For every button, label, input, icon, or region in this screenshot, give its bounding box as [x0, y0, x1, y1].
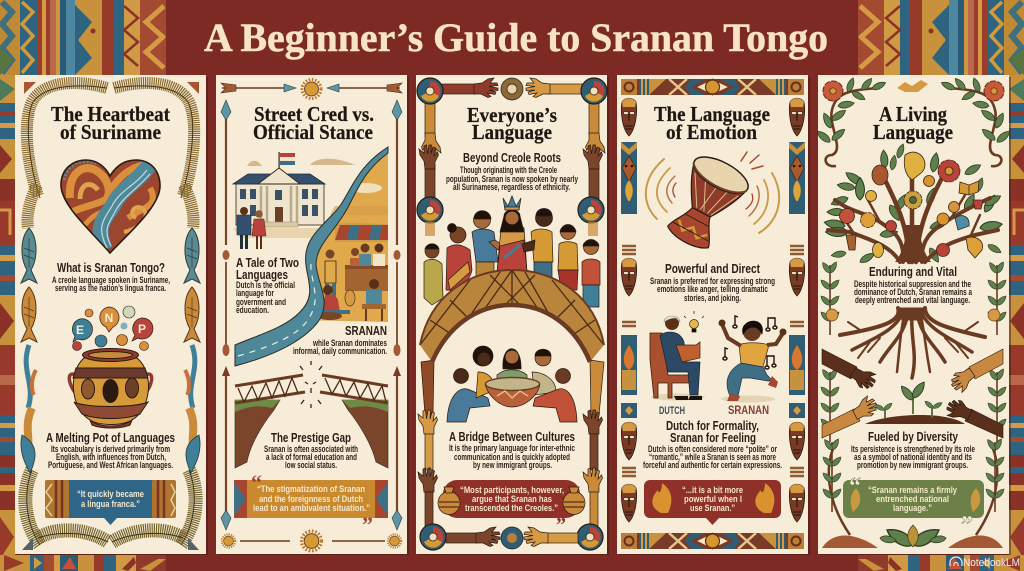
panel title [654, 102, 770, 144]
text block: tale of two languages: Languages [236, 268, 288, 282]
text block: melting pot of languages [46, 431, 175, 470]
text block: what is Sranan Tongo: What is Sranan Tongo? [57, 261, 165, 275]
text block: tale of two languages: education. [236, 305, 269, 315]
panel: The Language of Emotion [617, 75, 810, 555]
icon: speech bubbles rising from pot [72, 306, 153, 350]
text block: melting pot of languages: Portuguese, and West African languages. [48, 460, 173, 470]
icon: speech bubbles rising from pot: P [138, 322, 146, 336]
text block: Dutch for formality [643, 419, 782, 470]
text block: Dutch for formality: Dutch is often considered more “polite” or [648, 444, 777, 454]
text block: bridge between cultures: It is the primary language for inter-ethnic [449, 443, 575, 453]
text block: beyond Creole roots: all Surinamese, regardless of ethnicity. [453, 182, 570, 192]
text block: powerful and direct: Powerful and Direct [665, 262, 761, 276]
callout: lingua franca quote: a lingua franca.” [81, 498, 140, 509]
text block: bridge between cultures: by new immigrant groups. [473, 460, 552, 470]
labels: Dutch and Sranan: DUTCH [659, 405, 685, 417]
icon: four hands [822, 349, 1003, 438]
text block: melting pot of languages: A Melting Pot of Languages [46, 431, 175, 445]
callout: powerful when I use Sranan: powerful when I [684, 493, 742, 504]
illustration: river road between languages [235, 147, 388, 366]
panel title: Official Stance [253, 120, 373, 144]
illustration: broken bridge over cliffs [235, 361, 388, 468]
panel: Street Cred vs. Official Stance [216, 75, 409, 555]
callout: firmly entrenched quote: “ [849, 474, 861, 500]
border of arms, hands and medallions [417, 78, 607, 550]
text block: powerful and direct: Sranan is preferred for expressing strong [650, 276, 775, 286]
callout: stigmatization quote: “The stigmatization of Sranan [257, 483, 365, 494]
mask and totem columns [621, 98, 805, 522]
panel title: Street Cred vs. [254, 102, 374, 126]
panel title: of Suriname [60, 120, 161, 144]
callout: stigmatization quote: lead to an ambivalent situation.” [253, 502, 370, 513]
vine and flower border [815, 77, 1012, 550]
icon: speech bubbles rising from pot: E [76, 323, 84, 337]
text block: prestige gap: low social status. [285, 460, 337, 470]
illustration: Dutch speaker reading in a chair [650, 311, 705, 400]
callout: stigmatization quote: and the foreignness of Dutch [259, 493, 363, 504]
text block: enduring and vital: dominance of Dutch, Sranan remains a [854, 287, 972, 297]
panel title [467, 103, 557, 144]
icon: djembe drum with sound waves [646, 150, 779, 256]
panel title [873, 102, 953, 144]
callout: lingua franca quote: “It quickly became [77, 488, 144, 499]
text block: enduring and vital [854, 265, 972, 305]
textile border: top right [858, 0, 1024, 75]
illustration: government building with flag [233, 152, 355, 249]
text block: tale of two languages: A Tale of Two [236, 256, 299, 270]
illustration: community of people [424, 196, 600, 307]
text block: fueled by diversity: Its persistence is strengthened by its role [851, 444, 975, 454]
text block: enduring and vital: deeply entrenched and vital language. [855, 295, 970, 305]
text block: beyond Creole roots: population, Sranan is now spoken by nearly [446, 174, 578, 184]
callout: transcended the Creoles quote: ” [556, 514, 566, 536]
panel title: The Language [654, 102, 770, 126]
callout: stigmatization quote: ” [362, 512, 373, 537]
illustration: market side [302, 150, 388, 322]
callout: firmly entrenched quote: language.” [893, 502, 932, 513]
callout: transcended the Creoles quote: “Most participants, however, [460, 484, 564, 495]
illustration: tree of language [824, 143, 1003, 265]
textile border: left side [0, 75, 15, 571]
illustration: Sranan speaker dancing with music notes [718, 316, 786, 402]
icon: melting pot [69, 348, 152, 428]
callout: firmly entrenched quote: ” [961, 512, 973, 538]
callout: lingua franca quote [45, 480, 176, 525]
text block: prestige gap: The Prestige Gap [271, 431, 351, 445]
illustration: woven arch bridge [416, 265, 607, 365]
text block: melting pot of languages: Its vocabulary is derived primarily from [51, 444, 170, 454]
text block: enduring and vital: Enduring and Vital [869, 265, 957, 279]
callout: stigmatization quote: “ [251, 470, 262, 495]
watermark: NotebookLM: NotebookLM [963, 557, 1020, 569]
text block: what is Sranan Tongo [52, 261, 170, 293]
illustration: roots [840, 308, 985, 378]
text block: prestige gap: Sranan is often associated with [264, 444, 358, 454]
icon: sprouts on soil [865, 380, 965, 424]
text block: powerful and direct: emotions like anger, telling dramatic [657, 284, 768, 294]
text block: fueled by diversity [851, 430, 975, 470]
labels: Dutch and Sranan [659, 405, 769, 417]
text block: bridge between cultures: communication and is quickly adopted [454, 452, 570, 462]
title: A Beginner’s Guide to Sranan Tongo [204, 15, 828, 60]
text block: Dutch for formality: “romantic,” while a Sranan is seen as more [649, 452, 776, 462]
text block: tale of two languages: language for [236, 288, 274, 298]
text block: what is Sranan Tongo: A creole language spoken in Suriname, [52, 275, 170, 285]
panel: Everyone's Language [416, 75, 609, 555]
arrow and sun border [221, 80, 402, 551]
text block: Sranan label: informal, daily communication. [293, 346, 387, 356]
panel title: Language [472, 120, 552, 144]
textile border: right side [1009, 75, 1024, 571]
callout: powerful when I use Sranan: use Sranan.” [690, 502, 735, 513]
text block: tale of two languages: Dutch is the official [236, 280, 295, 290]
panel title: Language [873, 120, 953, 144]
panel: The Heartbeat of Suriname [15, 75, 208, 555]
text block: prestige gap: a lack of formal education and [266, 452, 357, 462]
text block: melting pot of languages: English, with influences from Dutch, [56, 452, 166, 462]
text block: Dutch for formality: forceful and authentic for certain expressions. [643, 460, 782, 470]
text block: beyond Creole roots: Though originating with the Creole [460, 165, 557, 175]
panel title: The Heartbeat [51, 102, 170, 126]
panel title: Everyone’s [467, 103, 557, 127]
text block: fueled by diversity: promotion by new immigrant groups. [857, 460, 968, 470]
text block: bridge between cultures [449, 430, 575, 470]
text block: fueled by diversity: Fueled by Diversity [868, 430, 958, 444]
icon: speech bubbles rising from pot: N [105, 311, 113, 325]
callout: transcended the Creoles quote: transcended the Creoles.” [465, 502, 558, 513]
patterned footer band [621, 533, 804, 549]
text block: tale of two languages [236, 256, 299, 315]
labels: Dutch and Sranan: SRANAN [728, 405, 769, 417]
illustration: people sharing a bowl [447, 346, 577, 422]
icon: two officials [237, 207, 266, 249]
textile border: top left [0, 0, 166, 75]
text block: beyond Creole roots [446, 151, 578, 192]
icon: heart with river [61, 160, 160, 253]
callout: firmly entrenched quote: “Sranan remains a firmly [868, 484, 958, 495]
palm frond border [22, 82, 199, 550]
text block: enduring and vital: Despite historical suppression and the [854, 279, 971, 289]
callout: powerful when I use Sranan [644, 480, 781, 525]
text block: prestige gap [264, 431, 358, 470]
panel: A Living Language [815, 75, 1012, 555]
panel title: of Emotion [666, 120, 757, 144]
text block: tale of two languages: government and [236, 297, 286, 307]
panel title [253, 102, 374, 144]
panel title: A Living [879, 102, 947, 126]
text block: Sranan label: SRANAN [345, 324, 387, 338]
callout: powerful when I use Sranan: “...it is a bit more [682, 484, 743, 495]
textile border: bottom left [0, 555, 166, 571]
callout: stigmatization quote [234, 470, 388, 537]
panel title [51, 102, 170, 144]
text block: Dutch for formality: Sranan for Feeling [670, 431, 756, 445]
callout: transcended the Creoles quote [438, 480, 585, 536]
textile border: bottom right [858, 555, 1024, 571]
callout: firmly entrenched quote [843, 474, 984, 538]
callout: transcended the Creoles quote: argue that Sranan has [472, 493, 552, 504]
icons: fish and river reeds [21, 228, 200, 473]
text block: Sranan label [293, 324, 387, 356]
text block: powerful and direct [650, 262, 775, 303]
text block: bridge between cultures: A Bridge Between Cultures [449, 430, 575, 444]
text block: fueled by diversity: as a symbol of national identity and its [854, 452, 972, 462]
text block: Sranan label: while Sranan dominates [312, 338, 387, 348]
patterned header band [621, 79, 804, 95]
text block: powerful and direct: stories, and joking. [684, 293, 741, 303]
text block: what is Sranan Tongo: serving as the nation’s lingua franca. [55, 283, 166, 293]
text block: Dutch for formality: Dutch for Formality, [666, 419, 759, 433]
text block: beyond Creole roots: Beyond Creole Roots [463, 151, 561, 165]
callout: firmly entrenched quote: entrenched national [876, 493, 949, 504]
